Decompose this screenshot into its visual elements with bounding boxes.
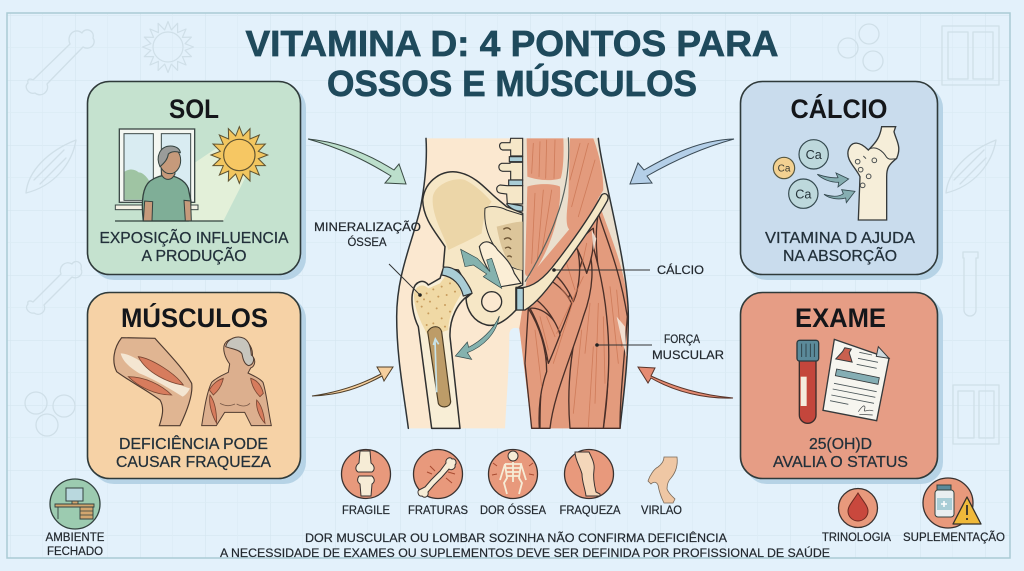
ilium shading <box>433 179 492 250</box>
text: sol: A PRODUÇÃO <box>142 245 246 265</box>
label: trinologia: TRINOLOGIA <box>822 532 891 544</box>
pelvis bone <box>423 172 523 325</box>
text: exame: 25(OH)D <box>809 436 872 453</box>
labels: symptoms: VIRLAO <box>641 505 682 517</box>
anatomy: hip bones and muscles <box>397 137 628 428</box>
icon: calcium molecules to bone: Ca <box>795 187 812 201</box>
text: sol <box>100 227 289 265</box>
icon: leg and shoulder muscles <box>114 337 271 426</box>
icon: calcium molecules to bone: Ca <box>778 164 791 175</box>
icon: bent leg <box>648 457 677 503</box>
text: exame: AVALIA O STATUS <box>773 454 908 471</box>
note: disclaimer: DOR MUSCULAR OU LOMBAR SOZINHA NÃO CONFIRMA DEFICIÊNCIA <box>305 530 727 545</box>
note: disclaimer: A NECESSIDADE DE EXAMES OU SUPLEMENTOS DEVE SER DEFINIDA POR PROFISSIONAL DE SAÚDE <box>220 545 830 560</box>
arrow: teal diagonal <box>461 249 502 288</box>
icon: fractures <box>414 450 462 498</box>
label: cálcio: CÁLCIO <box>657 264 704 277</box>
medullary cavity <box>428 327 451 407</box>
arrow: cálcio to anatomy <box>630 139 734 184</box>
label: mineralização óssea: ÓSSEA <box>348 236 387 249</box>
labels: symptoms: FRAQUEZA <box>560 505 621 517</box>
text: músculos: DEFICIÊNCIA PODE <box>119 434 268 453</box>
skin: left half <box>397 138 523 428</box>
femoral head cartilage <box>442 267 472 296</box>
title: OSSOS E MÚSCULOS <box>327 62 697 104</box>
vertebrae <box>497 138 523 211</box>
note: disclaimer <box>220 530 830 560</box>
title <box>246 23 778 104</box>
femur cancellous bone <box>414 277 462 337</box>
sacrum <box>485 207 523 270</box>
heading: cálcio: CÁLCIO <box>790 93 888 124</box>
labels: symptoms: FRAGILE <box>342 505 390 517</box>
icon: bone pain skeleton <box>488 450 538 498</box>
icon: supplement bottle with warning <box>923 478 981 528</box>
labels: symptoms <box>342 504 682 517</box>
panel: músculos <box>88 292 306 484</box>
text: exame <box>773 436 908 471</box>
icon: person at window with sun <box>115 127 268 221</box>
label: ambiente fechado: FECHADO <box>47 546 103 558</box>
icon: blood drop <box>838 488 878 528</box>
pubic symphysis <box>517 288 523 310</box>
icon: ambiente fechado desk <box>50 479 100 529</box>
text: músculos: CAUSAR FRAQUEZA <box>116 454 271 471</box>
icon: calcium molecules to bone <box>773 127 899 220</box>
heading: sol: SOL <box>169 94 219 124</box>
arrow: exame to anatomy <box>638 367 733 398</box>
icon row: symptoms <box>342 450 682 517</box>
arrow inside femur <box>433 339 439 392</box>
text: cálcio: NA ABSORÇÃO <box>783 245 897 265</box>
pubic ramus and inguinal ligament <box>516 194 608 310</box>
label: mineralização óssea: MINERALIZAÇÃO <box>314 221 421 234</box>
heading: músculos: MÚSCULOS <box>121 302 268 333</box>
label: ambiente fechado: AMBIENTE <box>46 532 105 544</box>
heading: exame: EXAME <box>795 303 886 333</box>
label: força muscular <box>595 334 724 362</box>
label: ambiente fechado <box>46 532 105 558</box>
labels: symptoms: DOR ÓSSEA <box>480 504 546 517</box>
icon: weak leg <box>564 450 614 498</box>
label: suplementação: SUPLEMENTAÇÃO <box>903 531 1005 544</box>
icon: blood tube and report <box>797 339 889 423</box>
text: cálcio <box>765 230 915 265</box>
text: músculos <box>116 434 271 471</box>
label: cálcio <box>552 264 704 277</box>
femur <box>412 268 472 428</box>
labels: symptoms: FRATURAS <box>408 505 468 517</box>
arrow: teal curved down <box>455 316 499 359</box>
arrow: sol to anatomy <box>308 139 406 184</box>
obturator area <box>479 242 521 287</box>
title: VITAMINA D: 4 PONTOS PARA <box>246 23 778 64</box>
label: mineralização óssea <box>314 221 422 297</box>
icon: calcium molecules to bone: Ca <box>806 148 823 162</box>
label: força muscular: MUSCULAR <box>652 350 724 362</box>
arrow: músculos to anatomy <box>312 367 393 396</box>
muscles: right half <box>519 137 628 428</box>
text: sol: EXPOSIÇÃO INFLUENCIA <box>100 227 289 247</box>
panel: sol <box>88 82 306 280</box>
panel: exame <box>740 292 943 484</box>
panel: cálcio <box>740 82 943 280</box>
background decorative icons <box>25 22 999 444</box>
label: força muscular: FORÇA <box>664 334 700 346</box>
icon: fragile joint <box>342 450 390 498</box>
text: cálcio: VITAMINA D AJUDA <box>765 230 915 247</box>
